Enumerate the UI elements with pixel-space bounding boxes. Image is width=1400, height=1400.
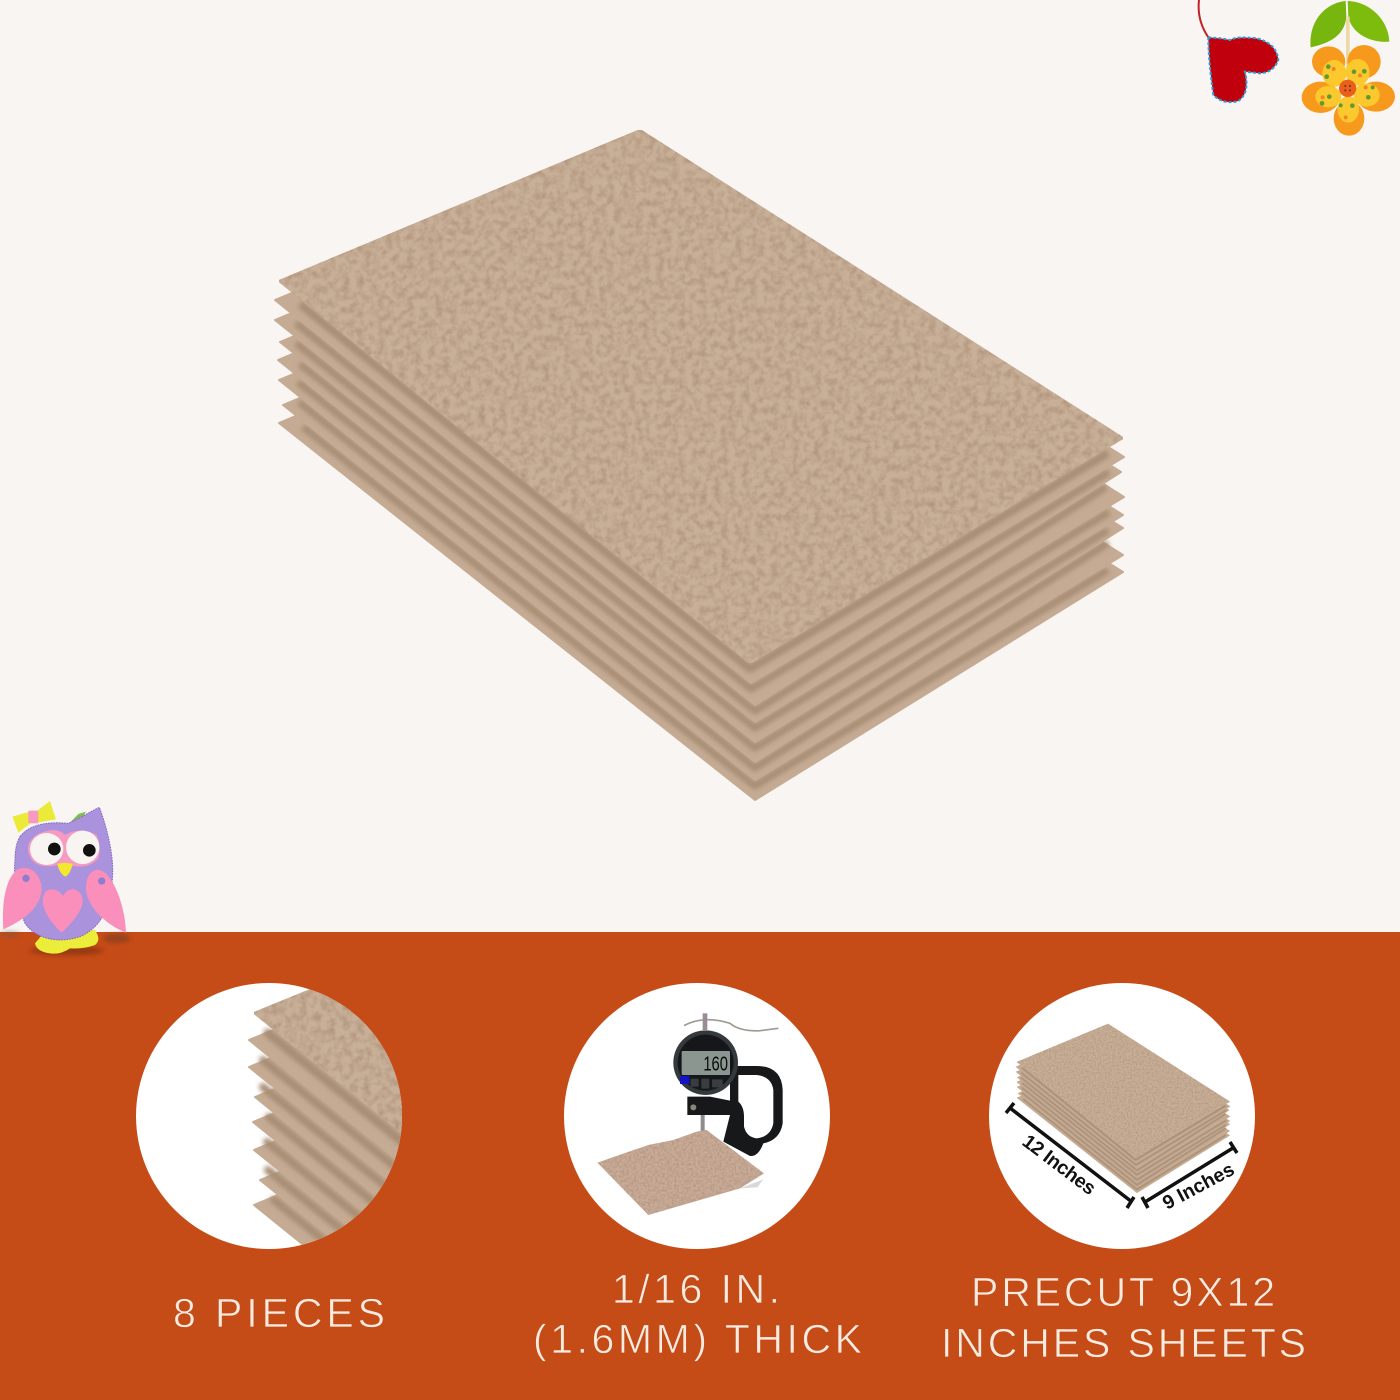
icon: felt owl: [0, 801, 130, 955]
display reading: 160: [703, 1054, 728, 1076]
caption: thickness: [533, 1266, 862, 1362]
circle 3: stack with dimensions: [989, 983, 1255, 1249]
orange footer band: [0, 932, 1400, 1400]
main image: stack of felt sheets: [275, 130, 1124, 800]
caption: sheet size: [941, 1269, 1306, 1366]
circle 2: thickness gauge on felt sheet: [564, 983, 830, 1249]
lever: [684, 1020, 778, 1031]
blue button: [680, 1076, 689, 1084]
felt sample: [740, 1179, 763, 1188]
spindle: [701, 1115, 705, 1133]
caption: 8 pieces: 8 PIECES: [173, 1290, 385, 1336]
display: [682, 1051, 730, 1075]
circle 1: felt sheet edge close-up: [136, 983, 402, 1249]
dimension line: 12 inches: [1006, 1103, 1134, 1208]
dial: [673, 1030, 738, 1095]
caption: thickness: (1.6MM) THICK: [533, 1316, 862, 1362]
caption: sheet size: INCHES SHEETS: [941, 1320, 1306, 1366]
icon: felt flower with leaves: [1302, 1, 1395, 136]
dimension label: 9 Inches: 9 Inches: [1159, 1158, 1238, 1214]
gauge frame: [687, 1066, 783, 1156]
caption: thickness: 1/16 IN.: [612, 1266, 780, 1312]
caption: sheet size: PRECUT 9X12: [971, 1269, 1275, 1315]
icon: red felt heart ornament: [1199, 0, 1278, 102]
dimension label: 12 Inches: 12 Inches: [1018, 1130, 1100, 1200]
dimension line: 9 inches: [1142, 1142, 1237, 1208]
